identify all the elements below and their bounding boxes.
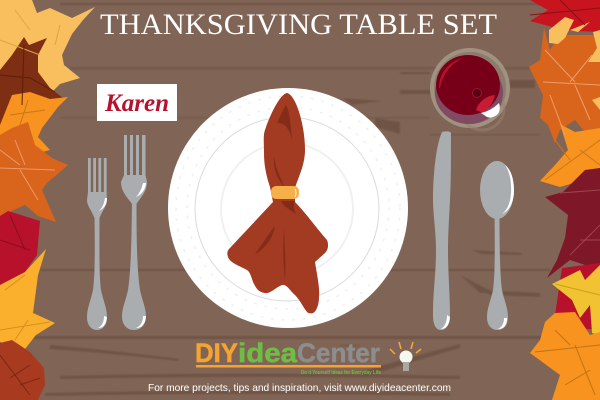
leaf: orange	[0, 92, 68, 155]
leaf: dark orange maple	[0, 122, 68, 222]
wine glass	[432, 50, 508, 130]
leaf: orange	[540, 124, 600, 187]
leaf: crimson	[0, 211, 40, 285]
logo	[195, 338, 381, 376]
logo: DIY	[195, 338, 238, 368]
leaf: yellow tips	[549, 17, 600, 110]
napkin ring	[271, 186, 299, 199]
leaf: brick	[0, 340, 45, 400]
right leaves	[529, 0, 600, 400]
icon: light bulb	[390, 342, 421, 371]
place card	[97, 84, 177, 121]
title: THANKSGIVING TABLE SET	[100, 8, 497, 41]
knife	[433, 131, 451, 330]
large fork	[121, 135, 147, 330]
plate	[168, 88, 408, 328]
left leaves	[0, 0, 95, 400]
footer text: For more projects, tips and inspiration, visit www.diyideacenter.com	[148, 382, 451, 394]
leaf: yellow	[552, 265, 600, 335]
small fork	[87, 158, 107, 330]
logo: idea	[238, 338, 298, 368]
leaf: brown maple	[0, 37, 63, 135]
leaf: dark orange maple	[529, 28, 600, 150]
leaf: burgundy	[545, 168, 600, 278]
name: Karen	[104, 90, 169, 117]
leaf: yellow top	[0, 0, 95, 100]
leaf: crimson	[555, 263, 600, 330]
napkin	[227, 93, 328, 313]
leaf: red top	[530, 0, 600, 32]
leaf: golden	[0, 249, 55, 349]
spoon	[480, 161, 514, 330]
leaf: bright orange maple	[530, 312, 600, 400]
logo: Center	[297, 338, 380, 368]
logo: Do it Yourself Ideas for Everyday Life	[301, 370, 381, 376]
